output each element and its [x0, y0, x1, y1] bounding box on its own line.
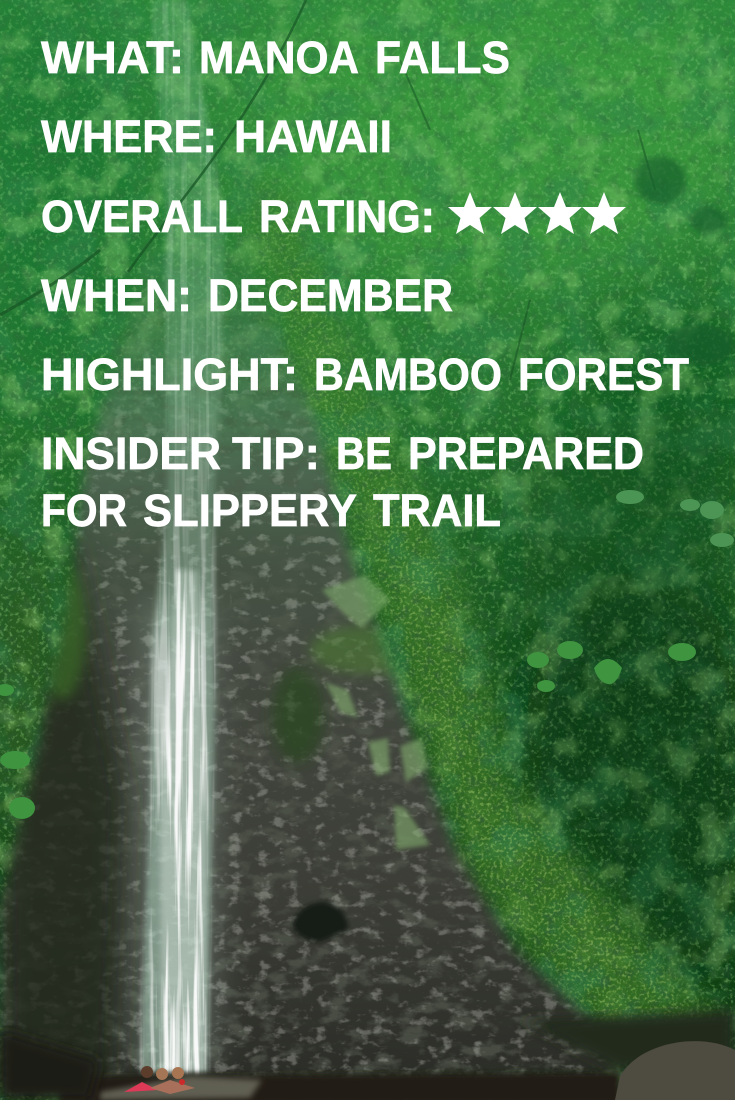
overall rating line	[41, 191, 435, 242]
where line	[41, 111, 392, 162]
highlight line: HIGHLIGHT:	[41, 349, 298, 400]
insider tip line 1	[41, 428, 644, 479]
swimmers	[124, 1066, 195, 1094]
insider tip line 2: TRAIL	[373, 485, 501, 536]
insider tip line 1: PREPARED	[408, 428, 644, 479]
cave opening	[292, 902, 348, 942]
boulder	[615, 1041, 735, 1100]
overall rating line: RATING:	[259, 191, 435, 242]
rock face	[0, 268, 620, 1086]
highlight line: BAMBOO	[314, 349, 502, 400]
mossy speckle on rock left	[48, 567, 90, 703]
vines	[0, 0, 655, 380]
insider tip line 1: BE	[336, 428, 392, 479]
what line	[41, 32, 510, 83]
waterfall	[116, 0, 230, 1076]
what line: FALLS	[375, 32, 510, 83]
foreground leaves	[0, 490, 734, 819]
highlight line	[41, 349, 689, 400]
falling water base	[137, 0, 226, 1075]
mid rock moss	[272, 667, 324, 763]
highlight line: FOREST	[518, 349, 689, 400]
insider tip line 1: TIP:	[232, 428, 320, 479]
when line	[41, 270, 453, 321]
pool foam	[100, 1076, 262, 1100]
insider tip line 1: INSIDER	[41, 428, 221, 479]
where line: WHERE:	[41, 111, 217, 162]
lower cliff dark base	[0, 1030, 100, 1100]
falling water core	[157, 566, 210, 1076]
insider tip line 2: FOR	[41, 485, 127, 536]
where line: HAWAII	[234, 111, 392, 162]
moss band on cliff	[233, 170, 726, 1021]
insider tip line 2: SLIPPERY	[143, 485, 357, 536]
pool	[60, 1072, 620, 1100]
lichen patches	[322, 575, 430, 850]
left mossy dark shading on rock	[0, 540, 125, 1090]
icon: four star rating	[448, 192, 626, 234]
text block: trip facts	[41, 32, 689, 536]
what line: WHAT:	[41, 32, 184, 83]
spray haze	[125, 600, 222, 1060]
dark shade over lower right jungle	[520, 400, 735, 990]
when line: DECEMBER	[208, 270, 453, 321]
insider tip line 2	[41, 485, 501, 536]
overall rating line: OVERALL	[41, 191, 243, 242]
when line: WHEN:	[41, 270, 192, 321]
what line: MANOA	[199, 32, 359, 83]
dark palm leaves	[634, 156, 735, 365]
